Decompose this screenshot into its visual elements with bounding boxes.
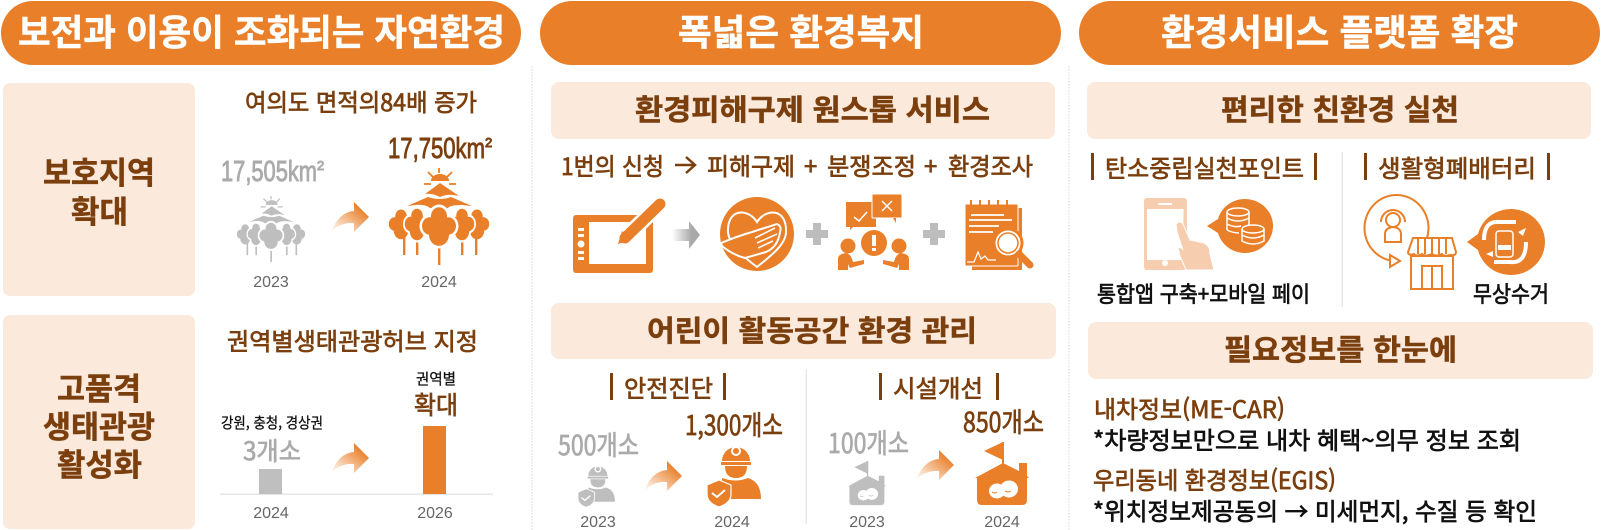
text: one-stop process: 분쟁조정 [827, 147, 916, 182]
header: platform: 환경서비스 플랫폼 확장 [1161, 4, 1518, 56]
arrow: grey [672, 221, 700, 249]
text: one-stop process: + [804, 147, 817, 182]
icon: orange worker [707, 446, 761, 507]
text: one-stop process: + [924, 147, 937, 182]
panel: eco tourism: 생태관광 [43, 402, 155, 447]
icon: tablet and pen [573, 204, 660, 273]
text: one-stop process [561, 147, 1033, 182]
subheading: safety check: 안전진단 [624, 369, 713, 404]
stat: 2023 area: 17,505km [221, 156, 317, 188]
caption: app and mobile pay: 통합앱 구축+모바일 페이 [1097, 277, 1310, 309]
panel: eco tourism [3, 315, 195, 529]
bar chart: hubs: 2026 [417, 505, 453, 522]
icon: heart and hands [720, 197, 794, 271]
stat: 1300 sites: 1,300개소 [685, 404, 783, 443]
stat: 100 sites: 100개소 [828, 422, 909, 461]
text: EGIS: 우리동네 환경정보(EGIS) [1093, 461, 1336, 496]
stat: 500 sites: 500개소 [558, 424, 639, 463]
header: nature: 보전과 이용이 조화되는 자연환경 [18, 4, 505, 56]
stat: 850 sites: 850개소 [963, 401, 1044, 440]
text: ME-CAR: *차량정보만으로 내차 혜택~의무 정보 조회 [1093, 421, 1521, 456]
panel: eco tourism: 고품격 [57, 364, 141, 409]
icon: battery bubble [1467, 209, 1545, 275]
text: one-stop process: 피해구제 [707, 147, 795, 182]
panel: needed info: 필요정보를 한눈에 [1224, 327, 1457, 369]
arrow: facility growth [916, 450, 954, 480]
text: EGIS [1093, 461, 1537, 527]
panel: eco practice: 편리한 친환경 실천 [1221, 87, 1459, 129]
icon: orange forest [389, 168, 489, 265]
panel: children's spaces: 어린이 활동공간 환경 관리 [647, 308, 977, 350]
panel: needed info [1088, 322, 1593, 379]
arrow: hub growth [331, 443, 369, 473]
panel: children's spaces [551, 303, 1056, 359]
icon: notepad and magnifier [965, 200, 1030, 270]
panel: protected area: 보호지역 [43, 148, 155, 193]
header: welfare: 폭넓은 환경복지 [678, 4, 924, 56]
panel: eco tourism: 활성화 [57, 440, 142, 485]
panel: protected area [3, 83, 195, 296]
arrow: area growth [331, 202, 369, 232]
arrow: safety growth [644, 461, 682, 491]
header: welfare [540, 1, 1061, 65]
bar chart: hubs: 권역별 [416, 368, 456, 389]
icon: plus [806, 223, 828, 245]
icon: grey forest [237, 196, 305, 262]
bar chart: hubs [220, 368, 493, 522]
year label: 2024 [421, 274, 457, 291]
bar chart: hubs: 강원, 충청, 경상권 [221, 412, 323, 433]
icon: plus [923, 223, 945, 245]
subheading: carbon points: 탄소중립실천포인트 [1105, 149, 1304, 184]
text: one-stop process: 환경조사 [948, 147, 1033, 182]
subheading: waste battery: 생활형폐배터리 [1378, 149, 1536, 184]
icon: store collection [1364, 195, 1456, 289]
icon: phone and coins [1144, 198, 1273, 270]
text: ME-CAR [1093, 390, 1521, 456]
panel: one-stop service [551, 82, 1055, 139]
subheading: protected area: 여의도 면적의84배 증가 [245, 83, 477, 118]
year label: 2023 [253, 274, 289, 291]
subheading: facility improvement: 시설개선 [893, 369, 983, 404]
panel: one-stop service: 환경피해구제 원스톱 서비스 [635, 87, 990, 129]
header: platform [1079, 1, 1600, 65]
bar chart: hubs: 3개소 [243, 432, 301, 468]
icon: orange house [975, 442, 1029, 505]
year labels [580, 514, 1020, 530]
stat: 2024 area: 17,750km [388, 133, 485, 165]
icon: mediation people [838, 194, 909, 270]
icon: grey worker [578, 466, 615, 507]
panel: protected area: 확대 [71, 187, 128, 232]
stat: 2024 area: 2 [485, 135, 492, 150]
text: ME-CAR: 내차정보(ME-CAR) [1094, 390, 1285, 425]
text: EGIS: *위치정보제공동의 → 미세먼지, 수질 등 확인 [1093, 492, 1537, 527]
caption: free collection: 무상수거 [1473, 277, 1549, 309]
subheading: eco tourism: 권역별생태관광허브 지정 [227, 322, 478, 357]
icon: grey house [848, 461, 886, 505]
bar chart: hubs: 확대 [414, 386, 458, 422]
bar chart: hubs: 2024 [253, 505, 289, 522]
panel: eco practice [1087, 82, 1591, 139]
stat: 2023 area: 2 [317, 158, 324, 173]
text: one-stop process: 1번의 신청 [561, 147, 664, 182]
